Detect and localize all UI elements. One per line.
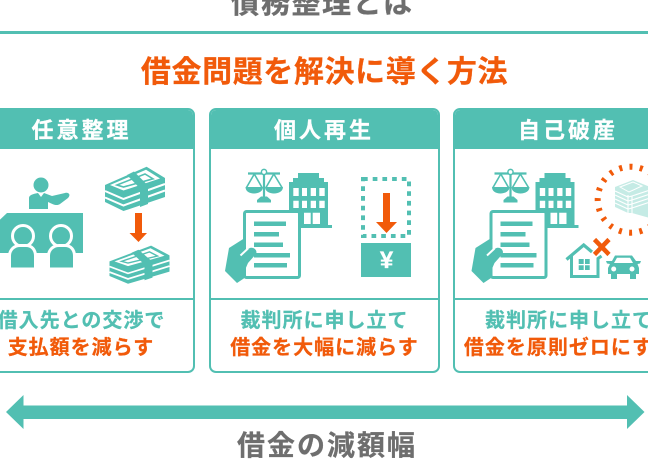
icon: reduced amount box [361,179,411,277]
icon: cross mark [594,240,609,254]
icon: lecturer and audience [0,178,83,269]
panel heading [210,110,438,149]
icon: court, building and document [225,169,332,283]
icon: court, building and document [472,169,578,283]
arrow: range of debt reduction [6,395,644,429]
panel heading [0,110,193,149]
icon: money stack after [110,246,170,284]
panel description line 2: 借金を大幅に減らす [230,337,419,359]
panel: voluntary arrangement [0,108,195,373]
panel heading: 自己破産 [518,118,618,143]
panel description line 1: 裁判所に申し立て [485,310,648,332]
label: debt reduction amount: 借金の減額幅 [237,430,417,461]
icon: reduced amount box: ¥ [380,247,394,274]
icon: debt disappearing [598,167,648,233]
icon: money stack before [105,167,165,211]
panel heading: 任意整理 [31,118,132,143]
panel description line 1: 裁判所に申し立て [240,310,408,332]
arrow: reduction [130,213,147,242]
subtitle: 借金問題を解決に導く方法 [141,56,508,89]
panel description line 1: 借入先との交渉で [0,310,165,332]
panel description line 2: 支払額を減らす [8,337,154,359]
panel divider [210,298,438,300]
panel: individual rehabilitation [208,108,440,373]
icon: car [606,256,641,279]
icon: house [566,245,602,276]
panel heading [454,110,648,149]
panel divider [0,298,193,300]
panel: bankruptcy [452,108,648,373]
panel heading: 個人再生 [274,118,374,143]
panel divider [454,298,648,300]
heading rule [0,31,648,34]
